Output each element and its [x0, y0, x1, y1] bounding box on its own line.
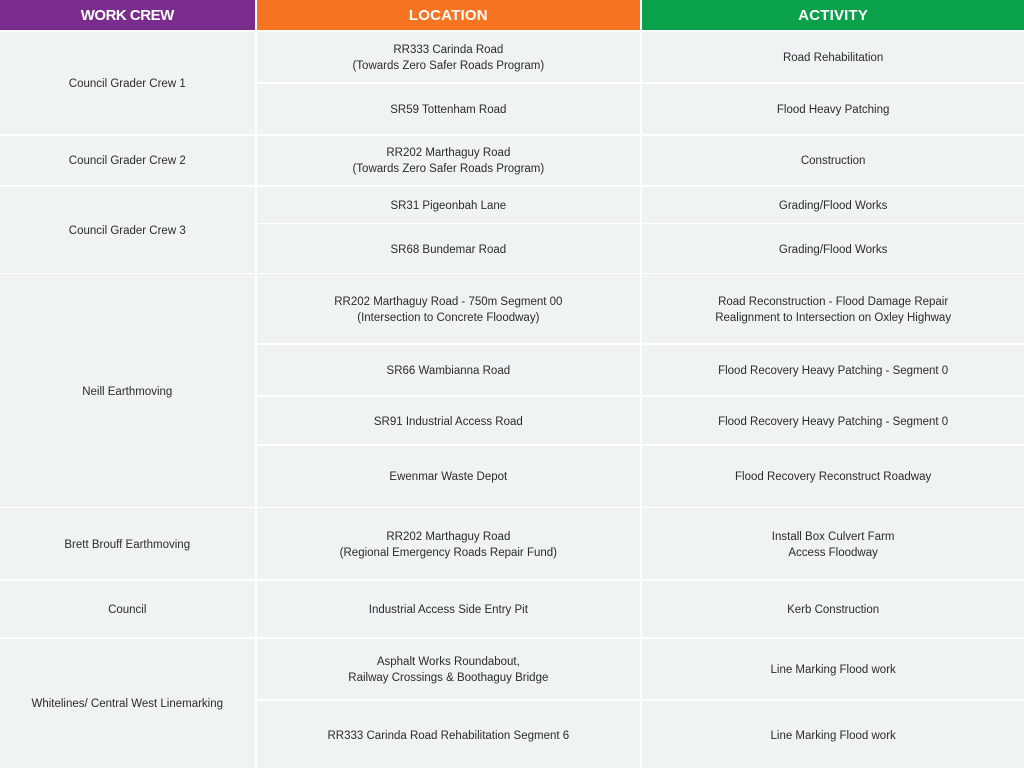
activity: Line Marking Flood work [642, 701, 1024, 768]
activity: Road Rehabilitation [642, 32, 1024, 82]
location: RR202 Marthaguy Road [257, 136, 640, 185]
location: RR333 Carinda Road: RR333 Carinda Road [393, 44, 503, 56]
header: work crew: WORK CREW [81, 6, 174, 24]
crew: Council Grader Crew 2 [0, 136, 254, 185]
location: SR91 Industrial Access Road [257, 397, 640, 444]
location: SR91 Industrial Access Road: SR91 Industrial Access Road [374, 416, 523, 428]
crew: Whitelines/ Central West Linemarking: Whitelines/ Central West Linemarking [31, 698, 223, 710]
activity: Flood Recovery Reconstruct Roadway: Flood Recovery Reconstruct Roadway [735, 471, 931, 483]
location: RR333 Carinda Road: (Towards Zero Safer Roads Program) [352, 60, 544, 72]
crew: Brett Brouff Earthmoving: Brett Brouff Earthmoving [64, 539, 190, 551]
activity: Road Reconstruction [642, 274, 1024, 343]
activity: Grading/Flood Works [642, 224, 1024, 273]
crew: Brett Brouff Earthmoving [0, 508, 254, 579]
activity: Install Box Culvert: Access Floodway [788, 547, 878, 559]
activity: Grading/Flood Works: Grading/Flood Works [779, 244, 887, 256]
activity: Flood Recovery Heavy Patching: Flood Recovery Heavy Patching - Segment 0 [718, 416, 948, 428]
location: Asphalt Works Roundabout [257, 639, 640, 699]
activity: Line Marking Flood work [642, 639, 1024, 699]
location: SR66 Wambianna Road [257, 345, 640, 395]
location: Industrial Access Side Entry Pit [257, 581, 640, 637]
activity: Road Reconstruction: Road Reconstruction - Flood Damage Repair [718, 296, 948, 308]
activity: Line Marking Flood work: Line Marking Flood work [770, 664, 896, 676]
crew: Council Grader Crew 3: Council Grader Crew 3 [69, 225, 186, 237]
activity: Install Box Culvert: Install Box Culvert Farm [772, 531, 894, 543]
location: SR66 Wambianna Road: SR66 Wambianna Road [387, 365, 510, 377]
location: Asphalt Works Roundabout: Railway Crossings & Boothaguy Bridge [348, 672, 548, 684]
location: RR202 Marthaguy Road 750m Segment 00: RR202 Marthaguy Road - 750m Segment 00 [334, 296, 562, 308]
location: RR202 Marthaguy Road regional fund: (Regional Emergency Roads Repair Fund) [340, 547, 557, 559]
activity: Flood Recovery Heavy Patching [642, 397, 1024, 444]
crew: Council Grader Crew 2: Council Grader Crew 2 [69, 154, 186, 166]
crew: Council [0, 581, 254, 637]
activity: Flood Heavy Patching [642, 84, 1024, 134]
location: SR59 Tottenham Road [257, 84, 640, 134]
header: location [257, 0, 640, 30]
activity: Line Marking Flood work: Line Marking Flood work [770, 730, 896, 742]
header: work crew [0, 0, 254, 30]
location: RR202 Marthaguy Road 750m Segment 00: (Intersection to Concrete Floodway) [357, 312, 539, 324]
activity: Kerb Construction: Kerb Construction [787, 604, 879, 616]
location: RR333 Carinda Road Rehabilitation Segment 6: RR333 Carinda Road Rehabilitation Segment 6 [328, 730, 569, 742]
activity: Grading/Flood Works: Grading/Flood Works [779, 200, 887, 212]
crew: Council Grader Crew 3 [0, 187, 254, 273]
activity: Flood Recovery Heavy Patching: Flood Recovery Heavy Patching - Segment 0 [718, 365, 948, 377]
location: Industrial Access Side Entry Pit: Industrial Access Side Entry Pit [369, 604, 528, 616]
activity: Flood Recovery Reconstruct Roadway [642, 446, 1024, 507]
location: SR31 Pigeonbah Lane [257, 187, 640, 223]
location: RR202 Marthaguy Road 750m Segment 00 [257, 274, 640, 343]
location: Ewenmar Waste Depot [257, 446, 640, 507]
location: RR202 Marthaguy Road regional fund [257, 508, 640, 579]
location: RR202 Marthaguy Road: RR202 Marthaguy Road [386, 146, 510, 158]
location: RR202 Marthaguy Road: (Towards Zero Safer Roads Program) [352, 162, 544, 174]
crew: Neill Earthmoving: Neill Earthmoving [82, 386, 172, 398]
location: Ewenmar Waste Depot: Ewenmar Waste Depot [389, 471, 507, 483]
activity: Grading/Flood Works [642, 187, 1024, 223]
location: SR68 Bundemar Road [257, 224, 640, 273]
crew: Whitelines/ Central West Linemarking [0, 639, 254, 768]
activity: Construction [642, 136, 1024, 185]
activity: Install Box Culvert [642, 508, 1024, 579]
activity: Road Rehabilitation: Road Rehabilitation [783, 52, 883, 64]
header: activity [642, 0, 1024, 30]
location: SR31 Pigeonbah Lane: SR31 Pigeonbah Lane [390, 200, 506, 212]
crew: Council: Council [108, 604, 146, 616]
location: Asphalt Works Roundabout: Asphalt Works Roundabout, [377, 656, 520, 668]
header: location: LOCATION [409, 6, 488, 24]
header: activity: ACTIVITY [798, 6, 868, 24]
location: SR68 Bundemar Road: SR68 Bundemar Road [390, 244, 506, 256]
activity: Construction: Construction [801, 154, 865, 166]
crew: Council Grader Crew 1 [0, 32, 254, 134]
location: RR333 Carinda Road Rehabilitation Segment 6 [257, 701, 640, 768]
crew: Neill Earthmoving [0, 274, 254, 507]
activity: Road Reconstruction: Realignment to Intersection on Oxley Highway [715, 312, 951, 324]
crew: Council Grader Crew 1: Council Grader Crew 1 [69, 78, 186, 90]
activity: Kerb Construction [642, 581, 1024, 637]
location: RR202 Marthaguy Road regional fund: RR202 Marthaguy Road [386, 531, 510, 543]
activity: Flood Heavy Patching: Flood Heavy Patching [777, 104, 889, 116]
activity: Flood Recovery Heavy Patching [642, 345, 1024, 395]
location: SR59 Tottenham Road: SR59 Tottenham Road [390, 104, 506, 116]
location: RR333 Carinda Road [257, 32, 640, 82]
